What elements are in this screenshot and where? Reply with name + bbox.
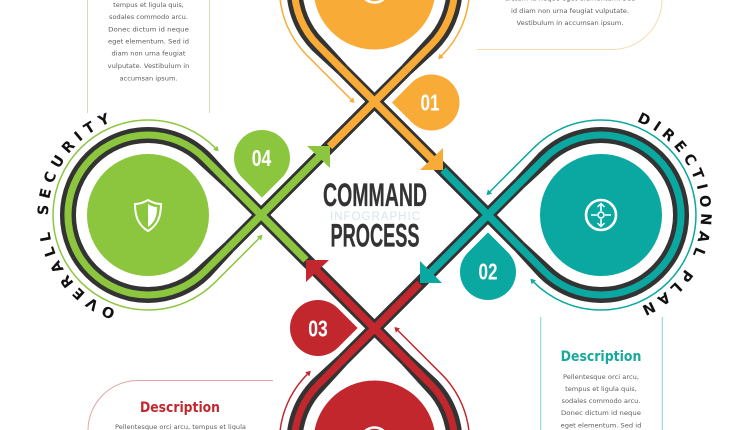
panel: teal description text — [541, 317, 662, 430]
panel: green description text: eget elementum. Sed id — [108, 38, 189, 46]
loop: teal segment — [425, 120, 696, 310]
badge: 03 — [290, 300, 358, 356]
panel: orange description text: Vestibulum in accumsan ipsum. — [516, 20, 624, 27]
curved label: directional plan: DIRECTIONAL PLAN — [638, 112, 712, 316]
panel: green description text: vulputate. Vestibulum in — [108, 63, 189, 70]
title: PROCESS — [330, 218, 420, 254]
panel: red description text — [88, 380, 273, 430]
curved label: overall security: OVERALL SECURITY — [37, 112, 114, 318]
icon: shield — [135, 200, 161, 231]
arrow: orange — [420, 148, 443, 170]
panel: green description text: sodales commodo arcu. — [109, 14, 188, 21]
badge: 02: 02 — [478, 258, 498, 284]
panel: orange description text: id diam non urna feugiat vulputate. — [511, 8, 629, 15]
icon: red loop (cropped) — [360, 428, 388, 430]
title — [323, 177, 427, 254]
badge: 04: 04 — [252, 145, 271, 171]
panel: green description text: tempus et ligula quis, — [113, 2, 184, 9]
loop: red segment — [280, 266, 470, 430]
panel: teal description text: Pellentesque orci arcu, — [563, 374, 639, 381]
loop: orange segment — [280, 0, 470, 165]
panel: green description text: accumsan ipsum. — [120, 75, 178, 82]
arrow: red — [306, 260, 329, 282]
arrow: green — [307, 146, 330, 168]
panel: green description text: diam non urna feugiat — [112, 51, 186, 58]
panel: orange description text — [477, 0, 662, 50]
badge: 01: 01 — [420, 90, 440, 116]
title: INFOGRAPHIC — [330, 211, 420, 223]
panel: green description text: Donec dictum id neque — [108, 26, 189, 33]
badge: 04 — [234, 130, 290, 198]
title: COMMAND — [323, 177, 427, 213]
loop: green segment — [53, 120, 324, 310]
badge: 03: 03 — [308, 316, 328, 342]
panel: teal description text: eget elementum. Sed id — [561, 423, 641, 430]
panel: red description text: Description — [140, 400, 220, 416]
panel: teal description text: Donec dictum id neque — [561, 410, 641, 417]
badge: 02 — [460, 232, 516, 300]
panel: teal description text: tempus et ligula quis, — [565, 386, 637, 393]
arrow: teal — [420, 261, 442, 283]
icon: compass — [586, 200, 616, 230]
panel: green description text — [88, 0, 210, 113]
panel: teal description text: sodales commodo arcu. — [562, 398, 641, 405]
icon: orange loop (cropped) — [360, 0, 388, 2]
badge: 01 — [392, 74, 459, 130]
panel: teal description text: Description — [561, 349, 641, 365]
